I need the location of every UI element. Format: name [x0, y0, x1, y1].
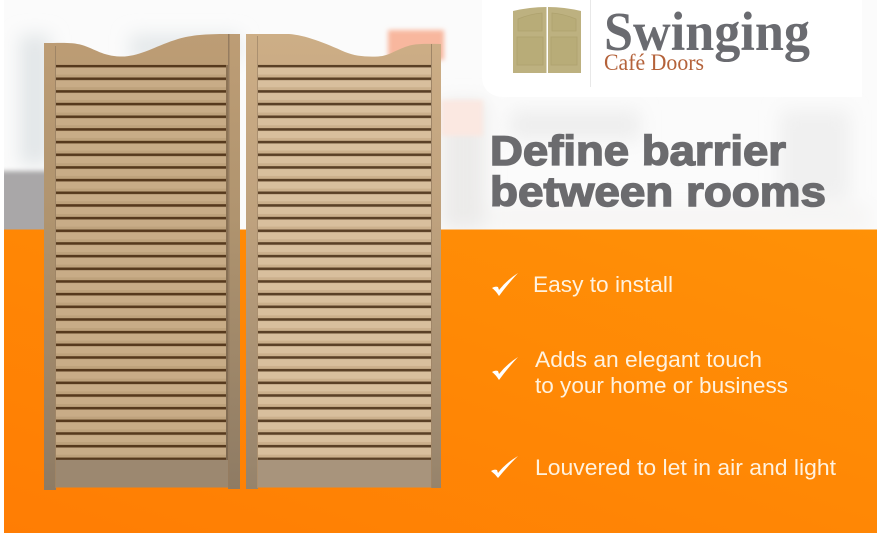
left louvered door — [44, 34, 240, 490]
bottom rail left — [56, 460, 228, 488]
logo divider — [590, 0, 591, 87]
icon: check mark — [492, 273, 518, 296]
logo wordmark: Swinging: Swinging — [604, 1, 810, 62]
icon: cafe doors logo — [513, 7, 581, 73]
icon: check mark — [492, 357, 518, 380]
benefit text: Louvered to let in air and light — [535, 455, 836, 480]
door frame left — [44, 34, 240, 490]
heading line 2: between rooms — [490, 168, 826, 215]
benefit: louvered — [491, 455, 836, 480]
benefit: easy to install — [492, 272, 673, 297]
benefit text: Adds an elegant touch — [535, 347, 762, 372]
louver slats left — [56, 65, 226, 460]
benefit text: Easy to install — [533, 272, 673, 297]
icon: check mark — [491, 456, 518, 478]
door frame right — [246, 34, 441, 489]
heading line 1: Define barrier — [490, 127, 786, 174]
blurred room background — [4, 26, 865, 230]
orange lower band — [4, 230, 877, 533]
logo wordmark: Café Doors: Café Doors — [604, 50, 704, 75]
stile edges left — [55, 34, 230, 489]
white logo background — [482, 0, 862, 97]
heading — [490, 127, 826, 215]
stile edges right — [257, 36, 432, 488]
benefit text — [535, 347, 788, 398]
benefit text: to your home or business — [535, 373, 788, 398]
right louvered door — [246, 34, 441, 489]
louver slats right — [258, 65, 431, 460]
benefit: elegant touch — [492, 347, 788, 398]
bottom rail right — [258, 460, 431, 488]
logo panel — [482, 0, 862, 97]
